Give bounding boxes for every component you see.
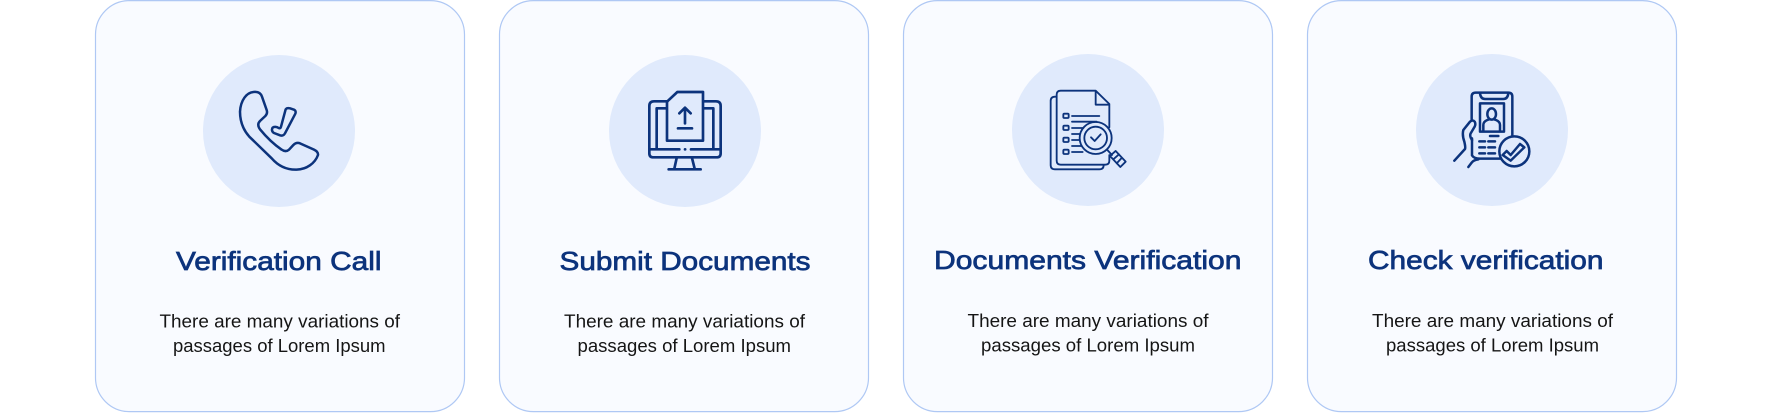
heading: Verification Call: [176, 246, 382, 276]
icon: telephone handset with check: [240, 92, 318, 170]
description: There are many variations of: [160, 310, 401, 332]
panel: Check verification: [1308, 1, 1676, 412]
description: passages of Lorem Ipsum: [578, 335, 791, 356]
card background: [904, 1, 1272, 412]
description: There are many variations of: [968, 310, 1209, 331]
description: passages of Lorem Ipsum: [1386, 334, 1599, 356]
description: passages of Lorem Ipsum: [173, 335, 386, 356]
description: There are many variations of: [1372, 310, 1614, 331]
icon circle: [1416, 54, 1568, 206]
heading: Submit Documents: [560, 246, 810, 276]
card background: [500, 1, 868, 412]
panel: Documents Verification: [904, 1, 1272, 412]
icon circle: [609, 55, 761, 207]
icon circle: [1012, 54, 1164, 206]
heading: Documents Verification: [934, 245, 1242, 275]
card background: [96, 1, 464, 412]
card background: [1308, 1, 1676, 412]
heading: Check verification: [1368, 245, 1604, 275]
icon circle: [203, 55, 355, 207]
icon: document checklist with magnifier: [1051, 91, 1126, 169]
panel: Verification Call: [96, 1, 464, 412]
description: passages of Lorem Ipsum: [981, 334, 1195, 356]
icon: hand holding ID phone with check badge: [1454, 93, 1529, 167]
description: There are many variations of: [564, 310, 806, 332]
icon: monitor with document upload: [649, 92, 721, 169]
panel: Submit Documents: [500, 1, 868, 412]
